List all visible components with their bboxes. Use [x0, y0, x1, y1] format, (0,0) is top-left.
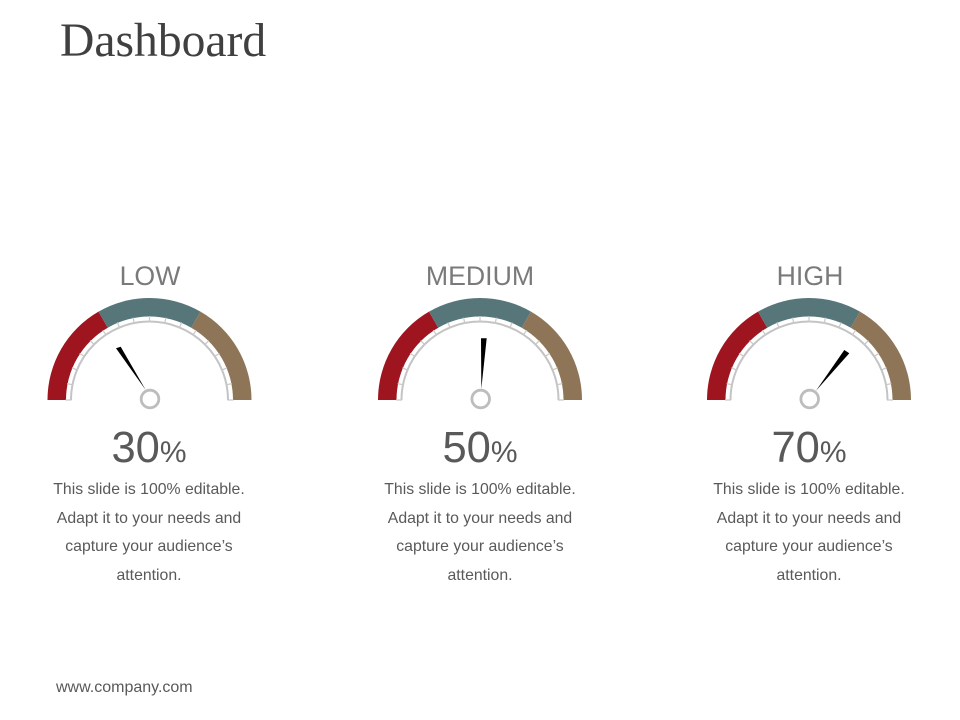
text block: medium: This slide is 100% editable.	[384, 481, 576, 498]
text block: high: capture your audience’s	[725, 538, 893, 555]
heading: medium: MEDIUM	[426, 261, 534, 291]
text block: high: Adapt it to your needs and	[717, 510, 901, 527]
text block: low	[53, 481, 245, 584]
value: 30%: 30%	[111, 424, 187, 472]
heading: low: LOW	[120, 261, 180, 291]
text block: medium	[384, 481, 576, 584]
text block: low: capture your audience’s	[65, 538, 233, 555]
footer url: www.company.com	[56, 679, 193, 696]
text block: medium: attention.	[448, 567, 512, 584]
heading: high: HIGH	[777, 261, 843, 291]
text block: medium: Adapt it to your needs and	[388, 510, 572, 527]
text block: medium: capture your audience’s	[396, 538, 564, 555]
text block: low: attention.	[116, 567, 182, 584]
title: Dashboard	[60, 15, 266, 67]
gauge: low	[48, 298, 252, 408]
text block: high: attention.	[776, 567, 842, 584]
value: 70%: 70%	[771, 424, 847, 472]
text block: low: This slide is 100% editable.	[53, 481, 245, 498]
text block: high: This slide is 100% editable.	[713, 481, 905, 498]
value: 50%: 50%	[442, 424, 518, 472]
gauge: medium	[378, 298, 582, 408]
gauge: high	[707, 298, 911, 408]
text block: low: Adapt it to your needs and	[57, 510, 241, 527]
text block: high	[713, 481, 905, 584]
